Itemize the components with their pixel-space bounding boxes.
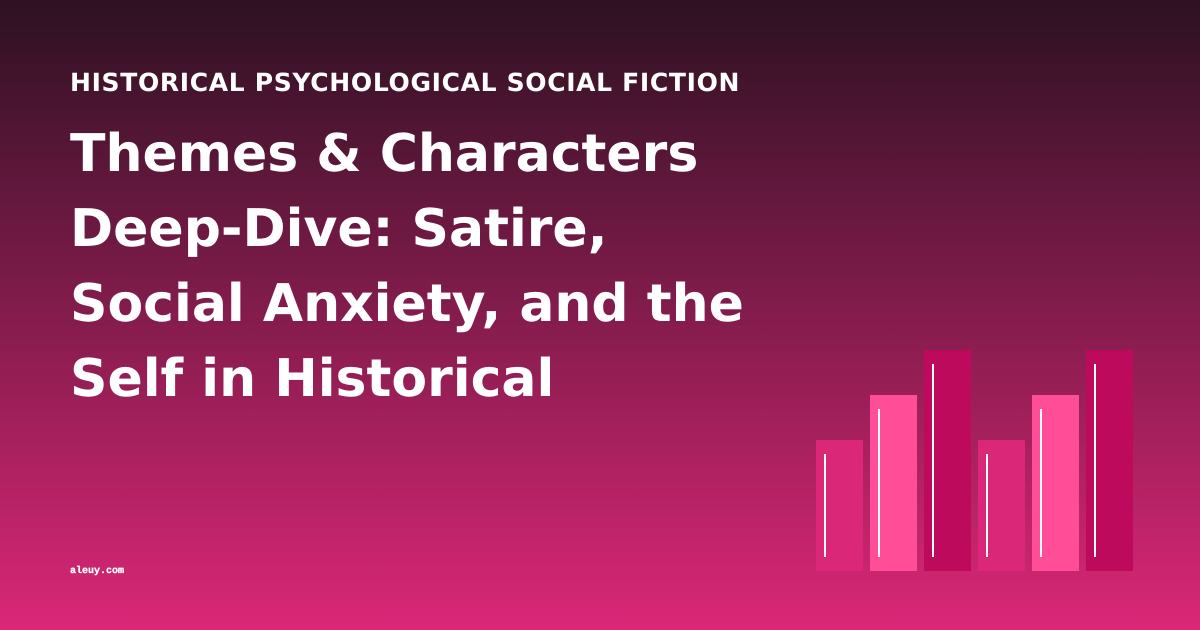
title: Social Anxiety, and the (70, 274, 744, 334)
title: Self in Historical (70, 349, 554, 409)
footer site name: aleuy.com (70, 566, 124, 577)
title: Deep-Dive: Satire, (70, 199, 607, 259)
title: Themes & Characters (70, 124, 698, 184)
eyebrow heading: HISTORICAL PSYCHOLOGICAL SOCIAL FICTION (70, 68, 740, 97)
bar chart decoration (816, 350, 1133, 571)
bar 4 (978, 440, 1025, 571)
bar 2 (870, 395, 917, 571)
bar 5 (1032, 395, 1079, 571)
bar 3 (924, 350, 971, 571)
bar 1 (816, 440, 863, 571)
bar 6 (1086, 350, 1133, 571)
title (70, 124, 744, 409)
